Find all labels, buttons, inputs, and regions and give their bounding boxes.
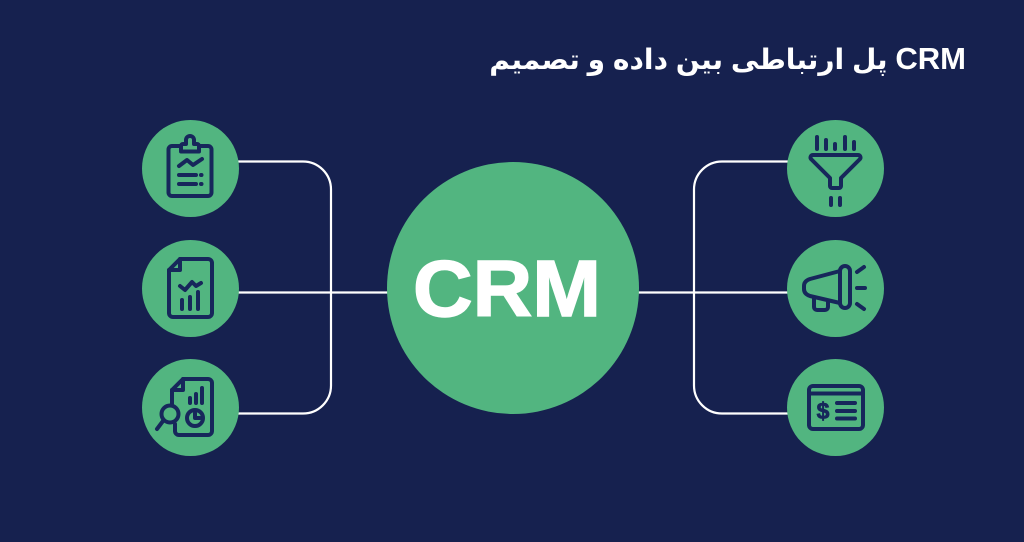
icon: funnel — [787, 120, 884, 217]
title: CRM پل ارتباطی بین داده و تصمیم — [489, 41, 966, 76]
central CRM hub: CRM — [413, 244, 601, 333]
central CRM hub — [387, 162, 639, 414]
icon: report document — [142, 240, 239, 337]
icon: clipboard — [142, 120, 239, 217]
icon: invoice window: $ — [817, 398, 830, 424]
icon: invoice window — [787, 359, 884, 456]
icon: analysis document with magnifier — [142, 359, 239, 456]
connector: right — [638, 162, 788, 414]
connector: left — [238, 162, 388, 414]
icon: megaphone — [787, 240, 884, 337]
